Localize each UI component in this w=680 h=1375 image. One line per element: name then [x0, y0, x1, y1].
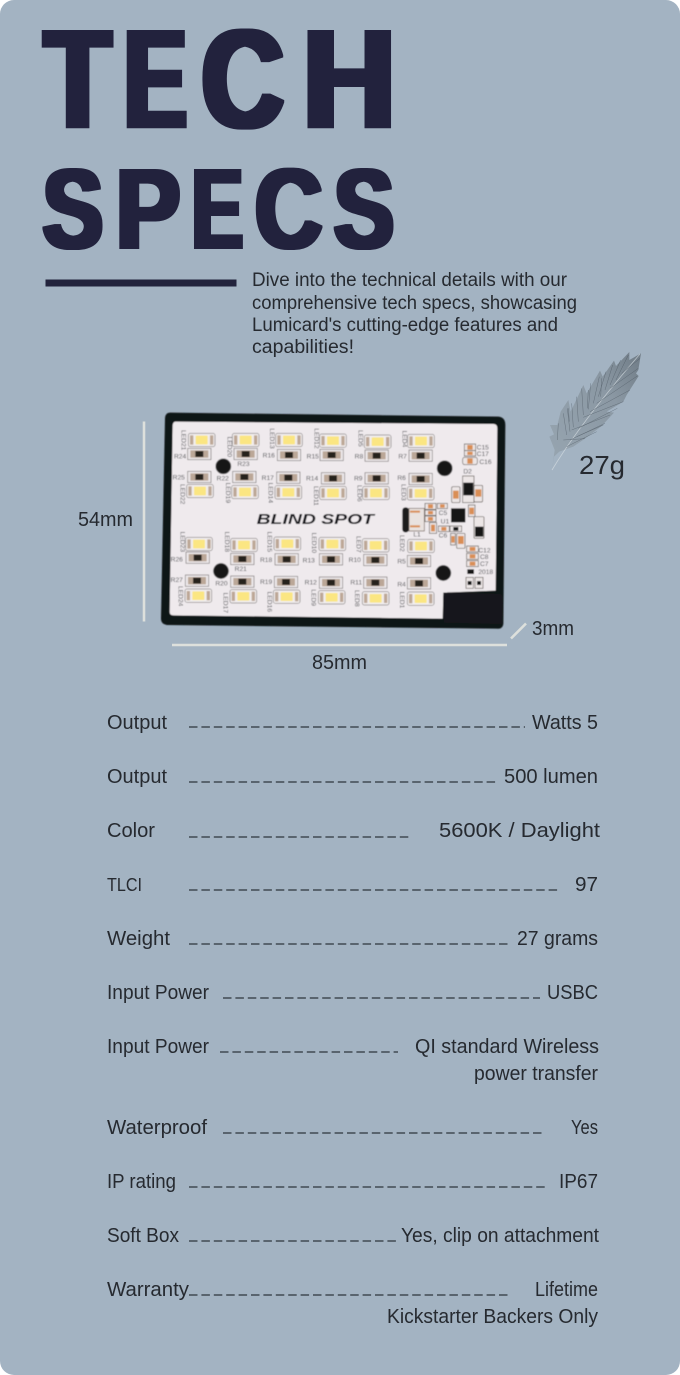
- component silkscreen labels: R22: [217, 476, 229, 483]
- row: warranty: Lifetime: [535, 1279, 598, 1301]
- component silkscreen labels: R7: [398, 454, 407, 461]
- component silkscreen labels: [171, 428, 493, 613]
- component silkscreen labels: LED3: [400, 484, 407, 501]
- component silkscreen labels: R8: [355, 454, 363, 461]
- row: TLCI: TLCI: [107, 874, 142, 895]
- dimension: height: 54mm: [78, 509, 133, 531]
- product image: Lumicard circuit board: [161, 413, 505, 629]
- component silkscreen labels: LED20: [225, 437, 232, 457]
- row: IP rating: [107, 1171, 598, 1193]
- intro text: comprehensive tech specs, showcasing: [252, 293, 577, 314]
- board casing: [161, 413, 505, 629]
- component silkscreen labels: R21: [235, 566, 247, 573]
- corner connector block: [443, 592, 503, 624]
- component silkscreen labels: R20: [215, 580, 228, 587]
- component silkscreen labels: LED19: [224, 483, 231, 503]
- title line: TECH: E: [124, 0, 186, 157]
- row: waterproof: [107, 1117, 598, 1139]
- row: soft box: Soft Box: [107, 1225, 179, 1247]
- component silkscreen labels: D2: [463, 468, 472, 475]
- title rule: [46, 280, 236, 286]
- title line: SPECS: S: [334, 146, 394, 273]
- row: input power wireless: [107, 1036, 599, 1085]
- row: warranty: Warranty: [107, 1279, 189, 1301]
- row: weight: Weight: [107, 928, 170, 950]
- component silkscreen labels: LED24: [176, 586, 183, 607]
- dimension: width: 85mm: [312, 652, 367, 674]
- component silkscreen labels: C5: [439, 510, 447, 517]
- row: soft box: [107, 1225, 599, 1247]
- component silkscreen labels: 2018: [478, 569, 493, 576]
- row: output lumen: [107, 766, 598, 788]
- component silkscreen labels: LED5: [356, 430, 363, 447]
- title line: SPECS: E: [192, 146, 243, 273]
- component silkscreen labels: LED1: [398, 592, 405, 609]
- component silkscreen labels: C17: [477, 451, 489, 458]
- component silkscreen labels: LED8: [353, 590, 360, 607]
- component silkscreen labels: C8: [480, 554, 489, 561]
- charging circuit components: [402, 444, 484, 588]
- title line: TECH: C: [202, 0, 283, 157]
- component silkscreen labels: LED21: [180, 430, 187, 451]
- brand name: BLIND SPOT: BLIND SPOT: [257, 512, 375, 528]
- component silkscreen labels: L1: [413, 532, 421, 539]
- row: color: 5600K / Daylight: [439, 819, 600, 842]
- resistors: [185, 448, 432, 589]
- row: input power USBC: USBC: [547, 982, 598, 1004]
- row: TLCI: [107, 874, 598, 896]
- component silkscreen labels: C12: [478, 548, 491, 555]
- component silkscreen labels: LED22: [179, 484, 186, 505]
- component silkscreen labels: R27: [171, 577, 183, 584]
- component silkscreen labels: C15: [477, 444, 489, 451]
- row: input power USBC: Input Power: [107, 982, 209, 1004]
- component silkscreen labels: R14: [306, 475, 319, 482]
- component silkscreen labels: LED11: [312, 486, 319, 506]
- row: color: [107, 819, 600, 842]
- component silkscreen labels: R15: [307, 454, 319, 461]
- component silkscreen labels: R6: [397, 475, 406, 482]
- component silkscreen labels: R11: [350, 579, 362, 586]
- row: output lumen: Output: [107, 766, 167, 788]
- row: weight: 27 grams: [517, 928, 598, 950]
- spec table: [107, 712, 600, 1328]
- row: warranty: [107, 1279, 598, 1328]
- row: IP rating: IP67: [559, 1171, 598, 1193]
- row: output lumen: 500 lumen: [504, 766, 598, 788]
- title: [43, 0, 396, 273]
- row: output watts: Output: [107, 712, 167, 734]
- component silkscreen labels: LED4: [401, 431, 408, 448]
- row: waterproof: Waterproof: [107, 1117, 207, 1139]
- dimension: thickness: 3mm: [532, 618, 574, 640]
- row: output watts: [107, 712, 598, 734]
- icon: feather: [549, 352, 641, 470]
- title line: TECH: H: [303, 0, 396, 157]
- LED modules: [185, 433, 434, 605]
- component silkscreen labels: LED23: [179, 532, 186, 552]
- row: warranty: Kickstarter Backers Only: [387, 1306, 598, 1328]
- row: weight: [107, 928, 598, 950]
- component silkscreen labels: LED18: [223, 532, 230, 552]
- weight label: 27g: [579, 450, 625, 480]
- row: output watts: Watts 5: [532, 712, 598, 734]
- component silkscreen labels: R13: [303, 558, 315, 565]
- component silkscreen labels: C7: [480, 561, 489, 568]
- intro text: [252, 270, 577, 358]
- row: TLCI: 97: [575, 874, 598, 896]
- intro text: Dive into the technical details with our: [252, 270, 568, 291]
- component silkscreen labels: R18: [260, 557, 273, 564]
- feather veins: [552, 354, 640, 470]
- title line: SPECS: C: [255, 146, 322, 273]
- component silkscreen labels: R26: [171, 556, 183, 563]
- component silkscreen labels: LED10: [310, 533, 317, 553]
- component silkscreen labels: R16: [263, 452, 275, 459]
- component silkscreen labels: R4: [397, 582, 406, 589]
- component silkscreen labels: LED12: [312, 428, 319, 449]
- component silkscreen labels: R12: [305, 579, 317, 586]
- component silkscreen labels: R17: [262, 475, 274, 482]
- component silkscreen labels: R23: [237, 461, 250, 468]
- title line: TECH: T: [44, 0, 111, 157]
- intro text: capabilities!: [252, 337, 354, 358]
- row: color: Color: [107, 820, 155, 842]
- row: soft box: Yes, clip on attachment: [401, 1225, 599, 1247]
- dimension: thickness: [511, 618, 574, 640]
- component silkscreen labels: LED16: [265, 592, 272, 612]
- intro text: Lumicard's cutting-edge features and: [252, 315, 558, 336]
- row: input power USBC: [107, 982, 598, 1004]
- component silkscreen labels: R9: [354, 476, 363, 483]
- component silkscreen labels: R25: [173, 474, 185, 481]
- row: waterproof: Yes: [571, 1117, 598, 1139]
- component silkscreen labels: LED9: [310, 589, 317, 606]
- component silkscreen labels: C16: [479, 459, 492, 466]
- component silkscreen labels: U1: [441, 518, 449, 525]
- row: input power wireless: Input Power: [107, 1036, 209, 1058]
- component silkscreen labels: LED14: [266, 483, 273, 503]
- component silkscreen labels: LED13: [268, 428, 275, 449]
- component silkscreen labels: R10: [349, 557, 361, 564]
- row: input power wireless: QI standard Wireless: [415, 1036, 599, 1058]
- title line: SPECS: P: [116, 146, 180, 273]
- row: IP rating: IP rating: [107, 1171, 176, 1193]
- component silkscreen labels: C6: [439, 532, 447, 539]
- component silkscreen labels: LED17: [221, 593, 228, 613]
- component silkscreen labels: LED15: [265, 532, 272, 552]
- component silkscreen labels: R19: [260, 579, 273, 586]
- mounting holes: [214, 459, 452, 580]
- row: input power wireless: power transfer: [474, 1063, 598, 1085]
- component silkscreen labels: LED6: [355, 485, 362, 502]
- component silkscreen labels: R5: [397, 558, 406, 565]
- component silkscreen labels: LED2: [398, 535, 405, 552]
- component silkscreen labels: R24: [174, 454, 187, 461]
- white circuit surface: [170, 422, 497, 619]
- component silkscreen labels: LED7: [355, 536, 362, 553]
- title line: SPECS: S: [43, 146, 103, 273]
